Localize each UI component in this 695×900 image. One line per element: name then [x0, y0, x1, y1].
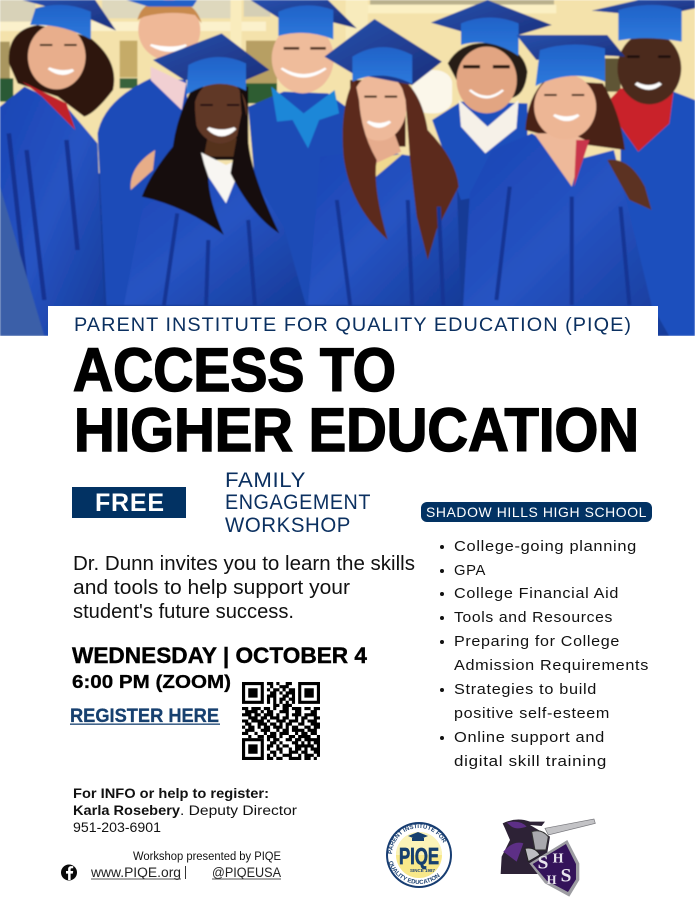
topic list: GPA: [454, 563, 486, 579]
website and social links: www.PIQE.org: [90, 865, 181, 880]
graduate: front girl in white collar: [124, 33, 306, 305]
logo: Shadow Hills knight: H: [553, 852, 564, 867]
topic list: College-going planning: [454, 539, 637, 555]
topic list: Tools and Resources: [454, 610, 613, 626]
graduate: curly-haired boy: [431, 0, 552, 200]
invitation text: and tools to help support your: [73, 577, 350, 599]
date: WEDNESDAY | OCTOBER 4: [72, 643, 368, 668]
workshop label: [225, 469, 371, 537]
workshop label: ENGAGEMENT: [225, 491, 371, 514]
icon: facebook: [61, 864, 77, 880]
graduate: center girl: [308, 19, 461, 305]
logo: PIQE seal: SINCE 1987: [410, 868, 436, 873]
logo: PIQE seal: PARENT INSTITUTE FOR: [388, 824, 446, 854]
hero photo: graduates in blue gowns and caps: [0, 0, 695, 336]
knight cape and helmet: [501, 820, 550, 874]
sword: [545, 819, 595, 835]
shield: [529, 840, 579, 897]
contact info: Karla Rosebery: [73, 803, 181, 818]
graduate: right boy: [592, 0, 695, 336]
graduate: right girl: [461, 35, 669, 336]
logo: Shadow Hills knight: H: [547, 873, 557, 887]
topic list: positive self-esteem: [454, 706, 610, 722]
graduate: back boy: [98, 0, 202, 305]
topic list: Admission Requirements: [454, 658, 649, 674]
topic list: Strategies to build: [454, 682, 597, 698]
invitation text: student's future success.: [73, 601, 294, 623]
topic list: digital skill training: [454, 754, 607, 770]
register link: REGISTER HERE: [70, 705, 219, 727]
presented by line: Workshop presented by PIQE: [133, 851, 281, 863]
topic list: [440, 539, 649, 770]
graduate: left girl: [0, 0, 116, 336]
contact info: . Deputy Director: [180, 803, 298, 818]
building background: [0, 0, 695, 336]
QR code: [242, 682, 320, 760]
time: 6:00 PM (ZOOM): [72, 671, 231, 692]
organisation name: PARENT INSTITUTE FOR QUALITY EDUCATION (PIQE): [74, 315, 632, 336]
invitation text: Dr. Dunn invites you to learn the skills: [73, 553, 415, 575]
title: [73, 336, 639, 464]
website and social links: [90, 865, 281, 880]
free badge: FREE: [95, 489, 164, 517]
free badge: [72, 487, 186, 518]
workshop label: FAMILY: [225, 469, 306, 492]
logo: Shadow Hills knight: S: [561, 866, 571, 887]
topic list: Online support and: [454, 730, 605, 746]
topic list: College Financial Aid: [454, 586, 619, 602]
invitation text: [73, 553, 415, 623]
header band: [48, 306, 658, 336]
workshop label: WORKSHOP: [225, 514, 351, 537]
logo: PIQE seal: PIQE: [399, 843, 439, 869]
title: HIGHER EDUCATION: [74, 396, 639, 464]
logo: PIQE seal: QUALITY EDUCATION: [389, 861, 440, 884]
logo: PIQE seal: [386, 822, 452, 888]
contact info: 951-203-6901: [73, 820, 161, 835]
contact info: For INFO or help to register:: [73, 786, 269, 801]
topic list: Preparing for College: [454, 634, 620, 650]
school name pill: SHADOW HILLS HIGH SCHOOL: [426, 504, 647, 520]
contact info: [73, 786, 298, 835]
logo: Shadow Hills knight: [501, 819, 595, 897]
title: ACCESS TO: [73, 336, 396, 404]
logo: Shadow Hills knight: S: [538, 852, 548, 873]
graduate: blue polo boy: [248, 0, 357, 305]
website and social links: @PIQEUSA: [212, 865, 281, 880]
